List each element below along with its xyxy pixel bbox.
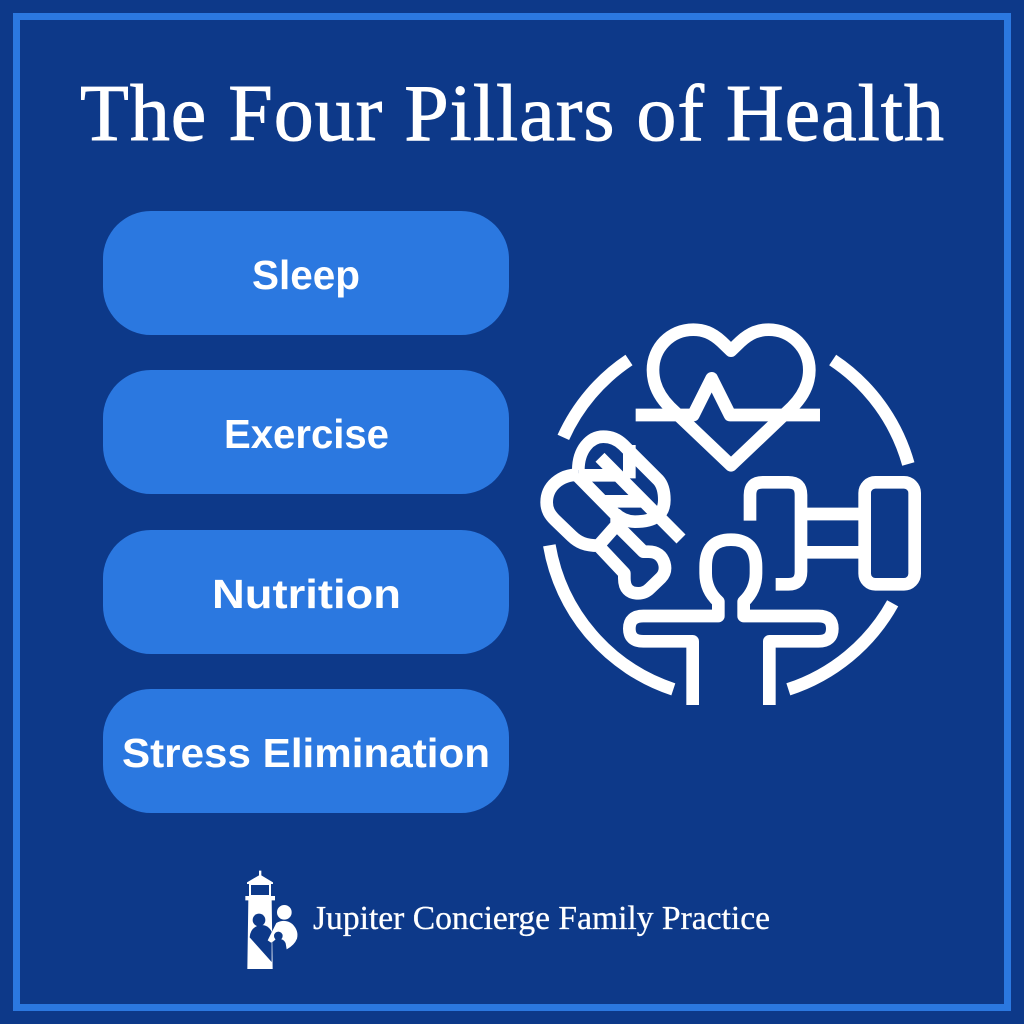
second adult and child bbox=[268, 905, 297, 949]
pillar: exercise: Exercise bbox=[224, 411, 389, 457]
pillar: stress elimination bbox=[103, 689, 509, 813]
adult figure cutout bbox=[250, 914, 272, 962]
icon: person bbox=[629, 540, 832, 705]
pillar: sleep bbox=[103, 211, 509, 335]
pillar: sleep: Sleep bbox=[252, 252, 360, 298]
wheat bbox=[578, 437, 664, 522]
lighthouse tower bbox=[245, 871, 275, 969]
icon: food bbox=[547, 437, 681, 593]
title: The Four Pillars of Health bbox=[80, 70, 944, 158]
icon: health circle bbox=[547, 330, 915, 705]
pillar: exercise bbox=[103, 370, 509, 494]
pillar: nutrition bbox=[103, 530, 509, 654]
pillar: stress elimination: Stress Elimination bbox=[122, 730, 490, 776]
logo: lighthouse bbox=[245, 871, 297, 969]
pillar: nutrition: Nutrition bbox=[212, 571, 401, 617]
icon: heart with pulse bbox=[636, 330, 820, 465]
panel: pillars list bbox=[103, 211, 509, 813]
icon: ring arcs bbox=[549, 360, 908, 689]
drumstick bbox=[547, 475, 665, 593]
logo: practice name: Jupiter Concierge Family Practice bbox=[313, 900, 770, 937]
icon: dumbbell bbox=[750, 482, 915, 584]
